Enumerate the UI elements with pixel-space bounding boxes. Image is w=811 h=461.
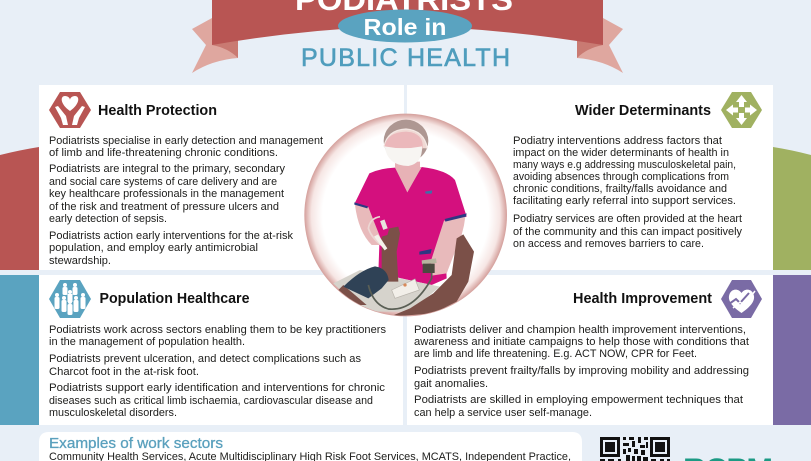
body text: of limb and life-threatening chronic conditions. [49,147,278,159]
body text: of the risk and treatment of pressure ulcers and [49,201,279,213]
body text: in the management of population health. [49,336,245,348]
body text: avoiding absences through complications from [513,171,729,183]
role in oval [338,10,472,42]
badge [425,190,432,194]
panel: examples of work sectors [39,432,582,461]
body text: Podiatrists prevent ulceration, and detect complications such as [49,353,361,365]
body text [513,135,743,250]
subtitle: PUBLIC HEALTH [301,44,510,72]
heading: Population Healthcare [100,291,250,307]
side band: green [773,147,811,270]
heading: Health Improvement [573,291,712,307]
body text: can help a service user self-manage. [414,407,592,419]
body text: Podiatrists are skilled in employing empowerment techniques that [414,394,744,406]
arms [355,205,383,245]
body text: facilitating early referral into support services. [513,195,736,207]
body text: Podiatry services are often provided at the heart [513,213,743,225]
cables [368,270,432,309]
body text: key healthcare professionals in the management [49,188,285,200]
panel: health protection [39,85,404,270]
body text: awareness and initiate campaigns to help those with conditions that [414,336,750,348]
panel: population healthcare [39,275,403,425]
sleeve trim [354,202,467,255]
body text: Podiatrists specialise in early detection and management [49,135,324,147]
panel: wider determinants [407,85,773,270]
side band: red [0,147,39,270]
face [384,132,423,150]
role in oval: Role in [364,14,446,40]
body text: Podiatrists deliver and champion health improvement interventions, [414,324,746,336]
second foot and leg [390,234,474,317]
body text: Podiatry interventions address factors that [513,135,723,147]
body text: population, and employ early antimicrobial [49,242,258,254]
body text: Podiatrists prevent frailty/falls by improving mobility and addressing [414,365,749,377]
body text: many ways e.g addressing musculoskeletal pain, [513,159,736,171]
side band: purple [773,275,811,425]
heading: Examples of work sectors [49,436,223,452]
cuff and lower leg [338,285,367,305]
body text: Podiatrists action early interventions for the at-risk [49,230,293,242]
body text: of the community and this can impact positively [513,226,742,238]
body text: musculoskeletal disorders. [49,407,177,419]
neck [395,162,420,192]
body text: stewardship. [49,255,111,267]
neck opening [413,167,422,182]
body text: Podiatrists are integral to the primary, secondary [49,163,285,175]
body text: impact on the wider determinants of health in [513,147,729,159]
body text [49,324,386,419]
mask [385,146,422,166]
body text: Podiatrists support early identification and interventions for chronic [49,382,385,394]
body text [414,324,750,419]
side band: blue [0,275,39,425]
body text: gait anomalies. [414,378,488,390]
icon: QR code [600,437,670,461]
body text: Podiatrists work across sectors enabling them to be key practitioners [49,324,386,336]
body text: are limb and life threatening. E.g. ACT NOW, CPR for Feet. [414,348,697,360]
body text: Charcot foot in the at-risk foot. [49,366,199,378]
banner ribbon [192,0,623,73]
device [392,279,419,298]
heading: Health Protection [98,103,217,119]
body text: early detection of sepsis. [49,213,167,225]
heading: Wider Determinants [575,103,711,119]
body text: diseases such as critical limb ischaemia, cardiovascular disease and [49,395,373,407]
scrubs [355,167,467,285]
body text: chronic conditions, frailty/falls avoidance and [513,183,727,195]
cap [384,120,428,158]
icon: four arrows [721,92,762,128]
body text [49,135,324,267]
icon: hands holding heart [49,92,91,128]
body text: and social care systems of care delivery and are [49,176,277,188]
icon: group of people [49,280,91,318]
panel: health improvement [407,275,773,425]
illustration: podiatrist treating a patient [304,114,507,317]
upright foot [382,227,400,282]
table [333,270,440,312]
body text: on access and removes barriers to care. [513,238,704,250]
icon: heart with rising graph [721,280,762,318]
